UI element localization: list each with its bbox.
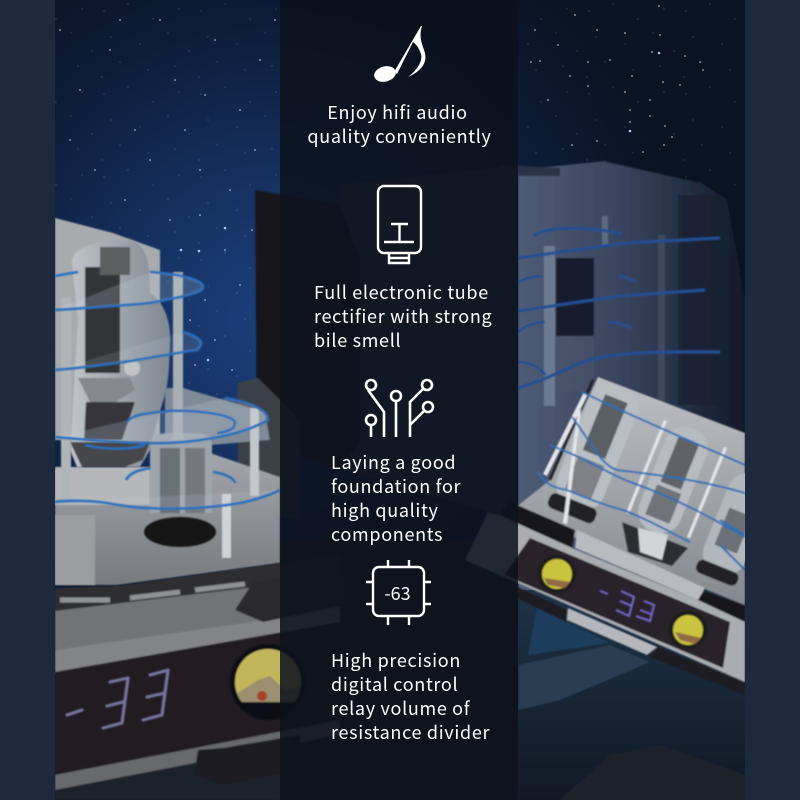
display digits -33: [67, 670, 168, 728]
text: rectifier: rectifier with strong: [314, 303, 492, 329]
icon: chip: [366, 560, 431, 625]
dark box amplifier behind centre: [238, 166, 519, 710]
lower silver strip: [55, 720, 340, 790]
feature 2: rectifier: [314, 186, 492, 353]
text: rectifier: [314, 279, 492, 353]
text: digital control: High precision: [331, 647, 461, 673]
posts: [543, 392, 727, 538]
text: components: foundation for: [331, 473, 462, 499]
centre dark panel: [280, 0, 518, 800]
text: rectifier: bile smell: [314, 327, 401, 353]
base grid under tube: [55, 467, 150, 505]
mid shelf plate: [165, 388, 270, 445]
small tube: [144, 433, 216, 547]
cylinder at left of chassis: [55, 515, 95, 585]
upper silver strip: [55, 587, 340, 651]
icon: circuit traces: [366, 380, 433, 437]
text: components: [331, 449, 462, 547]
ghost amplifier behind right side: [500, 161, 745, 600]
text: components: components: [331, 521, 443, 547]
text: hifi audio: Enjoy hifi audio: [327, 99, 468, 125]
feature 1: music: [307, 26, 492, 149]
text: digital control: resistance divider: [331, 719, 491, 745]
dark scene below right amplifier: [518, 590, 745, 800]
front face: [465, 512, 745, 682]
icon: chip: -63: [384, 580, 411, 606]
text: digital control: relay volume of: [331, 695, 471, 721]
text: digital control: digital control: [331, 671, 458, 697]
blue acrylic rings: [55, 272, 280, 509]
chrome strip: [55, 562, 280, 612]
silver upper strip: [575, 530, 705, 600]
feature 4: digital control: [331, 560, 491, 745]
right amp meters: [538, 555, 707, 649]
black feet: [235, 575, 345, 622]
lower black strip and foot: [518, 586, 568, 622]
lower chassis top: [55, 453, 280, 585]
rings: [538, 392, 745, 570]
text: components: Laying a good: [331, 449, 456, 475]
left amplifier: front panel: [55, 555, 345, 800]
left amplifier: tubes and acrylic rings: [55, 218, 280, 585]
right amplifier: [466, 376, 745, 695]
right amp digits -33: [600, 591, 654, 621]
dark display panel: [55, 632, 280, 776]
metal posts: [61, 272, 259, 558]
dark panel: [504, 538, 730, 668]
text: digital control: [331, 647, 491, 745]
tubes: [547, 394, 634, 524]
rear metal plate: [55, 218, 160, 440]
text: rectifier: Full electronic tube: [314, 279, 489, 305]
text: hifi audio: quality conveniently: [307, 123, 492, 149]
plate edge: [550, 380, 593, 480]
feature 3: components: [331, 380, 462, 547]
VU meter: [230, 644, 310, 720]
text: hifi audio: [307, 99, 492, 149]
large tube: [70, 240, 170, 467]
black trim: [510, 505, 576, 548]
chassis plate: [510, 377, 745, 605]
text: components: high quality: [331, 497, 439, 523]
icon: music note: [372, 26, 425, 84]
icon: electronic tube: [378, 186, 421, 263]
